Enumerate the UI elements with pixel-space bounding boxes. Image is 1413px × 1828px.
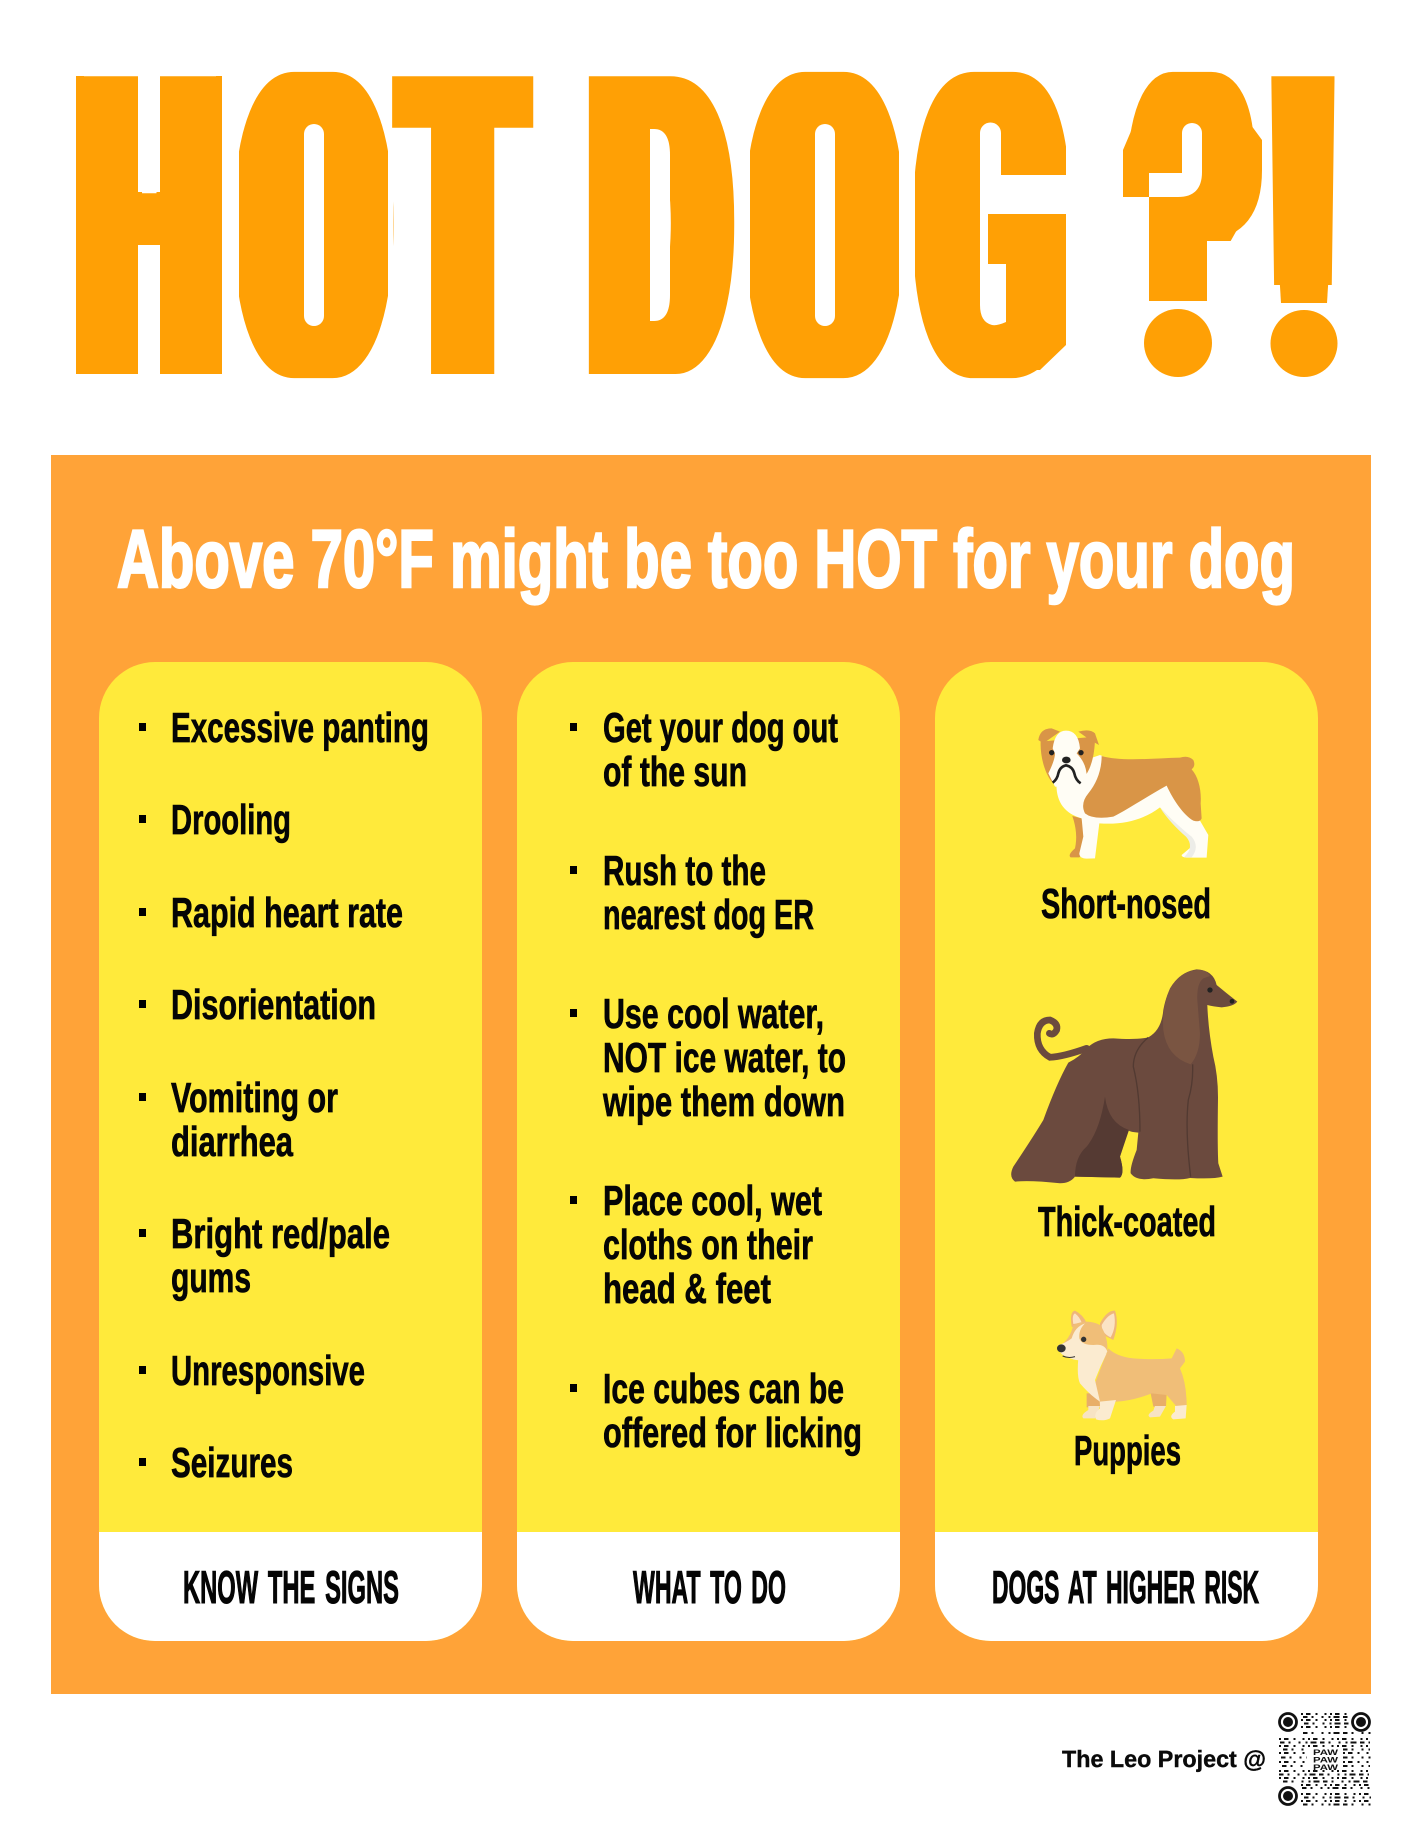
icon: bulldog — [1038, 728, 1208, 859]
signs list: Seizures — [171, 1439, 293, 1486]
actions list: Place cool, wet — [603, 1177, 822, 1224]
signs list: gums — [171, 1254, 251, 1301]
actions list: NOT ice water, to — [603, 1034, 846, 1081]
panel: main orange background — [51, 455, 1371, 1694]
actions list: wipe them down — [602, 1078, 845, 1125]
actions list — [570, 704, 862, 1456]
signs list: Vomiting or — [171, 1074, 338, 1121]
actions list: cloths on their — [603, 1221, 813, 1268]
footer label: know the signs: KNOW THE SIGNS — [183, 1561, 399, 1613]
finder dots — [1280, 1714, 1370, 1804]
icon: corgi puppy — [1057, 1311, 1187, 1420]
actions list: Rush to the — [603, 847, 766, 894]
QR centre text: PAW — [1313, 1763, 1339, 1772]
panel: know the signs — [99, 662, 482, 1641]
actions list: Ice cubes can be — [603, 1365, 844, 1412]
label: short-nosed: Short-nosed — [1041, 880, 1211, 927]
actions list: Use cool water, — [603, 990, 824, 1037]
footer label: what to do: WHAT TO DO — [633, 1561, 786, 1613]
credit text: The Leo Project @ — [1062, 1746, 1266, 1772]
actions list: offered for licking — [603, 1409, 862, 1456]
actions list: head & feet — [603, 1265, 771, 1312]
panel: dogs at higher risk — [935, 662, 1318, 1641]
signs list: Drooling — [171, 796, 291, 843]
actions list: of the sun — [603, 748, 747, 795]
signs list — [139, 704, 429, 1486]
icon: afghan hound — [1011, 969, 1237, 1183]
signs list: Bright red/pale — [171, 1210, 390, 1257]
label: puppies: Puppies — [1074, 1427, 1181, 1474]
signs list: diarrhea — [171, 1118, 293, 1165]
signs list: Disorientation — [171, 981, 376, 1028]
signs list: Excessive panting — [171, 704, 429, 751]
signs list: Rapid heart rate — [171, 889, 403, 936]
QR centre text — [1313, 1748, 1339, 1772]
signs list: Unresponsive — [171, 1347, 365, 1394]
QR centre text: PAW — [1313, 1756, 1339, 1764]
QR centre text: PAW — [1313, 1748, 1339, 1757]
label: thick-coated: Thick-coated — [1038, 1198, 1216, 1245]
actions list: nearest dog ER — [603, 891, 814, 938]
QR code — [1279, 1714, 1371, 1804]
title: HOT DOG ?! — [86, 0, 1332, 463]
actions list: Get your dog out — [603, 704, 838, 751]
panel: what to do — [517, 662, 900, 1641]
